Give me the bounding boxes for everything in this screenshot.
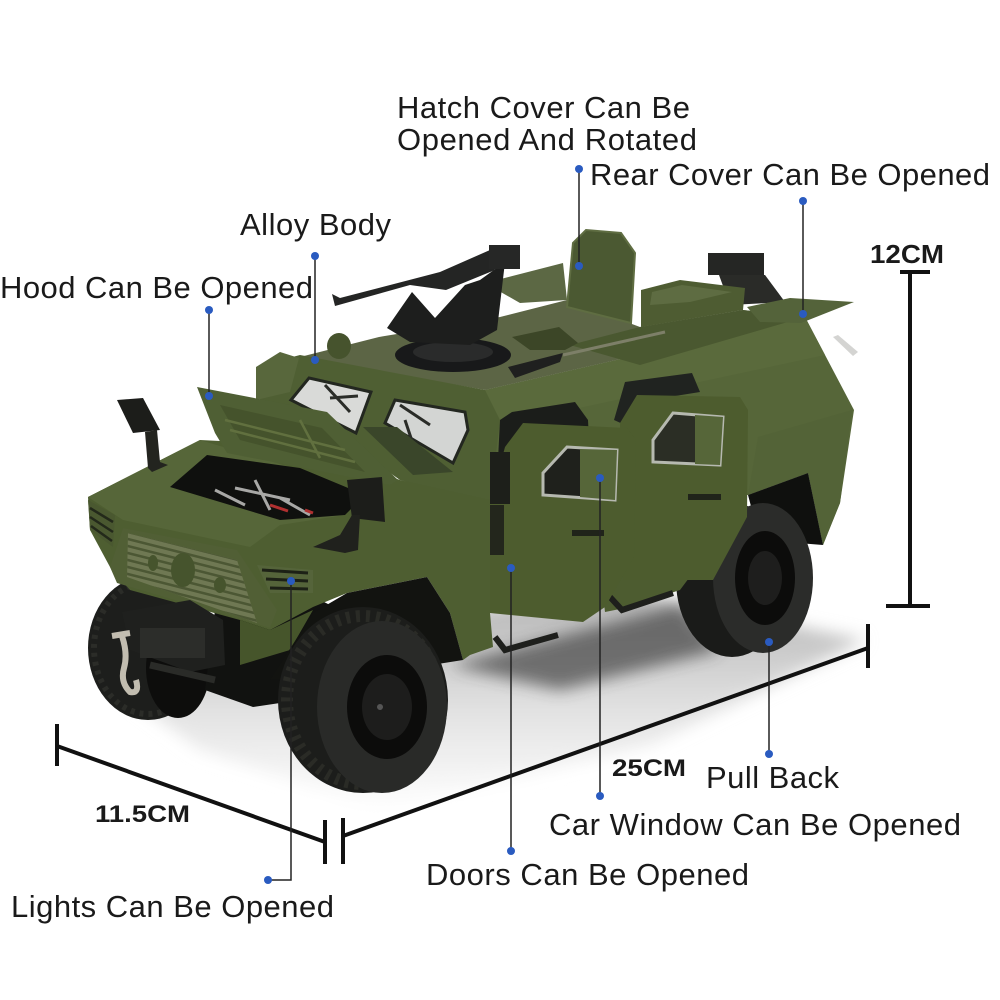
callout: hood: Hood Can Be Opened	[0, 270, 313, 305]
rear body shell	[485, 317, 854, 545]
callout: hatch cover: Hatch Cover Can Be	[397, 90, 690, 125]
front wheel	[278, 607, 448, 793]
callout: car window	[549, 474, 961, 842]
dimension: width 11.5CM	[57, 724, 325, 864]
callout: lights	[11, 577, 334, 924]
windshields	[291, 378, 468, 463]
lower front apron	[240, 610, 313, 665]
rear body lower facet	[748, 410, 852, 545]
callout: alloy body: Alloy Body	[240, 207, 392, 242]
wheel arch	[270, 577, 463, 680]
front door	[490, 423, 636, 622]
door openings	[497, 373, 700, 480]
callout: hood	[0, 270, 313, 400]
callout: doors: Doors Can Be Opened	[426, 857, 749, 892]
winch and bumper	[112, 600, 225, 692]
rear body upper band	[485, 317, 825, 425]
callout: doors	[426, 564, 749, 892]
front body	[88, 440, 493, 660]
dimension: height 12CM	[870, 239, 944, 606]
open hood	[197, 387, 453, 485]
callout: rear cover	[590, 157, 990, 318]
cab corner block and knob	[256, 333, 351, 400]
rear wheel well	[748, 473, 823, 545]
dimension: height 12CM: 12CM	[870, 239, 944, 269]
rear wheel	[676, 503, 813, 657]
hatch hole	[512, 327, 578, 350]
grille face	[110, 533, 257, 623]
cab	[256, 355, 500, 505]
front step	[495, 635, 558, 650]
callout: rear cover: Rear Cover Can Be Opened	[590, 157, 990, 192]
callout: lights: Lights Can Be Opened	[11, 889, 334, 924]
callout: alloy body	[240, 207, 392, 364]
far front wheel	[88, 576, 210, 720]
callout: hatch cover: Opened And Rotated	[397, 122, 697, 157]
engine bay	[170, 455, 365, 520]
floor shadow	[120, 590, 865, 810]
dimension: width 11.5CM: 11.5CM	[95, 801, 190, 828]
lower sill between doors	[600, 570, 695, 612]
callout: car window: Car Window Can Be Opened	[549, 807, 961, 842]
front top surface	[88, 440, 345, 547]
rear door	[620, 395, 748, 580]
side louvres	[88, 500, 313, 593]
side mirrors	[117, 398, 385, 553]
dimension: length 25CM	[343, 624, 868, 864]
callout: pull back: Pull Back	[706, 760, 840, 795]
callout: hatch cover	[397, 90, 697, 270]
dimension: length 25CM: 25CM	[612, 755, 686, 782]
roof	[300, 300, 805, 390]
callout: pull back	[706, 638, 840, 795]
underbody	[205, 600, 400, 707]
machine gun turret	[332, 245, 563, 378]
tray flap and rear equipment	[485, 253, 858, 356]
antenna	[563, 332, 665, 355]
rear cover lid	[747, 298, 854, 323]
raised hatch cover	[567, 230, 635, 323]
rear tray	[641, 280, 745, 327]
vehicle	[88, 230, 858, 793]
rear step	[610, 593, 673, 610]
